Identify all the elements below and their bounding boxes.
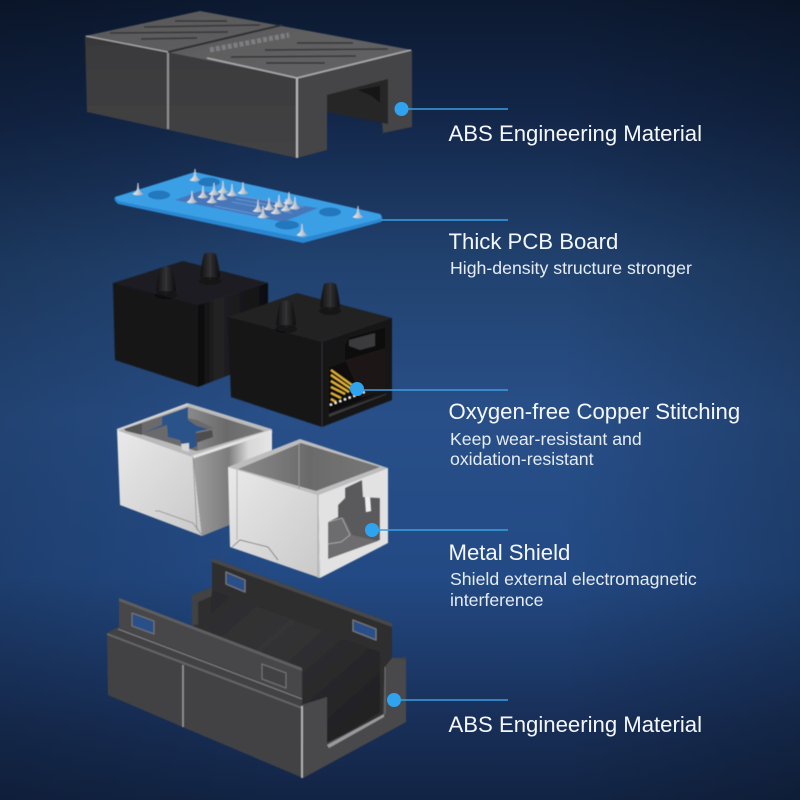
front metal shield bbox=[228, 439, 388, 578]
bottom ABS shell bbox=[107, 558, 406, 778]
description: copper: oxidation-resistant bbox=[450, 449, 594, 469]
description: metal shield: Shield external electromagnetic bbox=[450, 569, 697, 589]
description: PCB: High-density structure stronger bbox=[450, 258, 692, 278]
top ABS shell bbox=[85, 11, 412, 158]
callout line: bottom shell bbox=[387, 693, 508, 707]
label: metal shield: Metal Shield bbox=[448, 540, 570, 565]
callout line: metal shield bbox=[365, 523, 508, 537]
label: PCB: Thick PCB Board bbox=[448, 229, 618, 254]
PCB board bbox=[114, 169, 382, 243]
callout line: copper bbox=[350, 382, 508, 396]
description: metal shield: interference bbox=[450, 590, 544, 610]
label: ABS material (bottom): ABS Engineering Material bbox=[448, 712, 702, 737]
description: copper: Keep wear-resistant and bbox=[450, 429, 642, 449]
front black module bbox=[228, 282, 392, 427]
callout line: top shell bbox=[394, 102, 508, 116]
callout line: PCB bbox=[381, 219, 508, 221]
description: copper bbox=[450, 429, 642, 469]
back metal shield bbox=[117, 404, 272, 536]
label: copper: Oxygen-free Copper Stitching bbox=[448, 399, 740, 424]
description: metal shield bbox=[450, 569, 697, 610]
label: ABS material (top): ABS Engineering Material bbox=[448, 121, 702, 146]
back black module bbox=[113, 252, 268, 387]
